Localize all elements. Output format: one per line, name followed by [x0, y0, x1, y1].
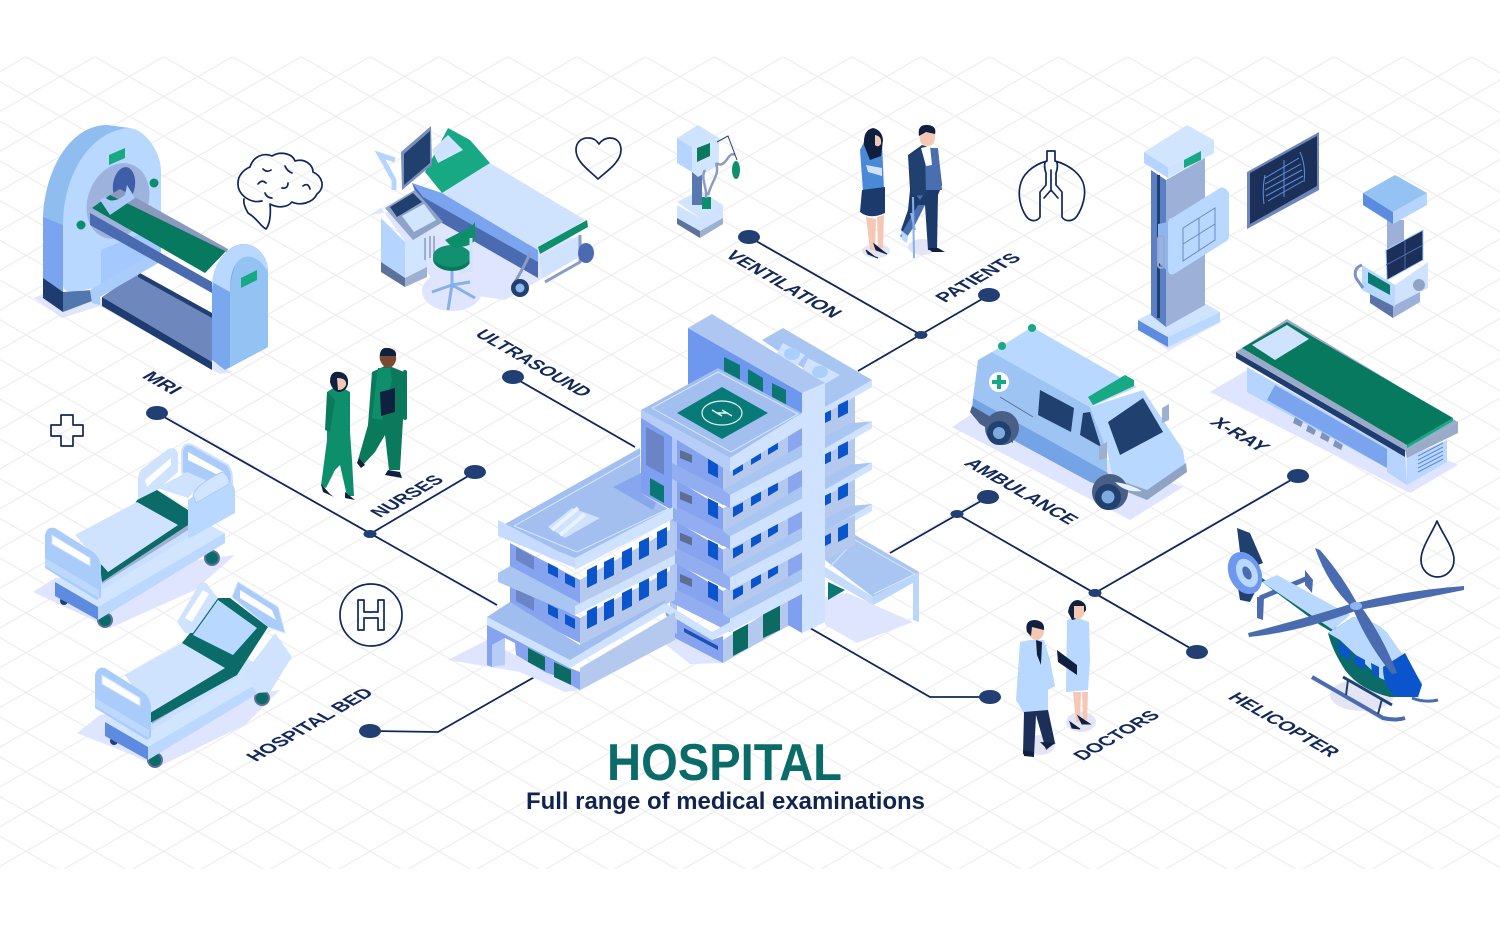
icon: brain — [238, 153, 322, 229]
label: hospital bed: HOSPITAL BED — [242, 685, 379, 765]
label: nurses: NURSES — [366, 472, 449, 521]
female doctor — [1057, 600, 1090, 729]
ventilator — [677, 125, 740, 238]
x-ray stand — [1133, 125, 1229, 350]
MRI scanner — [34, 125, 268, 374]
label: MRI: MRI — [137, 369, 186, 398]
hospital bed raised — [77, 582, 292, 767]
label: ultrasound: ULTRASOUND — [470, 327, 596, 400]
icon: lungs — [1019, 151, 1085, 221]
label: x-ray: X-RAY — [1205, 415, 1274, 455]
subtitle: Full range of medical examinations — [526, 788, 925, 815]
icon: drop — [1421, 521, 1454, 577]
building shadows — [448, 593, 913, 692]
label: ventilation: VENTILATION — [720, 248, 846, 321]
hospital building — [448, 314, 919, 692]
x-ray ceiling unit — [1355, 175, 1428, 318]
far head rail — [182, 444, 232, 490]
icon: H circle — [340, 584, 402, 646]
man patient with crutches — [900, 125, 945, 258]
label: helicopter: HELICOPTER — [1223, 690, 1344, 760]
left wing — [487, 448, 675, 690]
ultrasound machine — [370, 126, 595, 311]
male nurse — [357, 348, 407, 478]
male doctor — [1016, 620, 1056, 757]
tower floors — [641, 410, 802, 640]
label: ambulance: AMBULANCE — [959, 456, 1083, 528]
patients — [860, 125, 945, 258]
woman patient — [860, 128, 887, 258]
x-ray table — [1210, 319, 1458, 493]
title: HOSPITAL — [607, 734, 842, 792]
tower roof with helipad — [641, 368, 802, 472]
main column — [802, 383, 825, 633]
near-side far panel — [138, 448, 178, 500]
back wall with teal windows — [688, 314, 825, 420]
nurses — [321, 348, 407, 500]
connector lines — [146, 230, 1309, 738]
right wing — [825, 535, 919, 622]
label: doctors: DOCTORS — [1069, 708, 1165, 764]
label: patients: PATIENTS — [931, 250, 1026, 306]
x-ray film — [1247, 132, 1319, 229]
doctors — [1016, 600, 1096, 757]
icon: plus — [51, 415, 83, 446]
icon: heart — [576, 138, 621, 179]
helicopter — [1221, 528, 1464, 720]
right podium — [665, 585, 802, 663]
rear floors — [762, 328, 872, 560]
ambulance — [952, 324, 1187, 520]
hospital bed flat — [33, 444, 235, 628]
female nurse — [321, 372, 355, 500]
